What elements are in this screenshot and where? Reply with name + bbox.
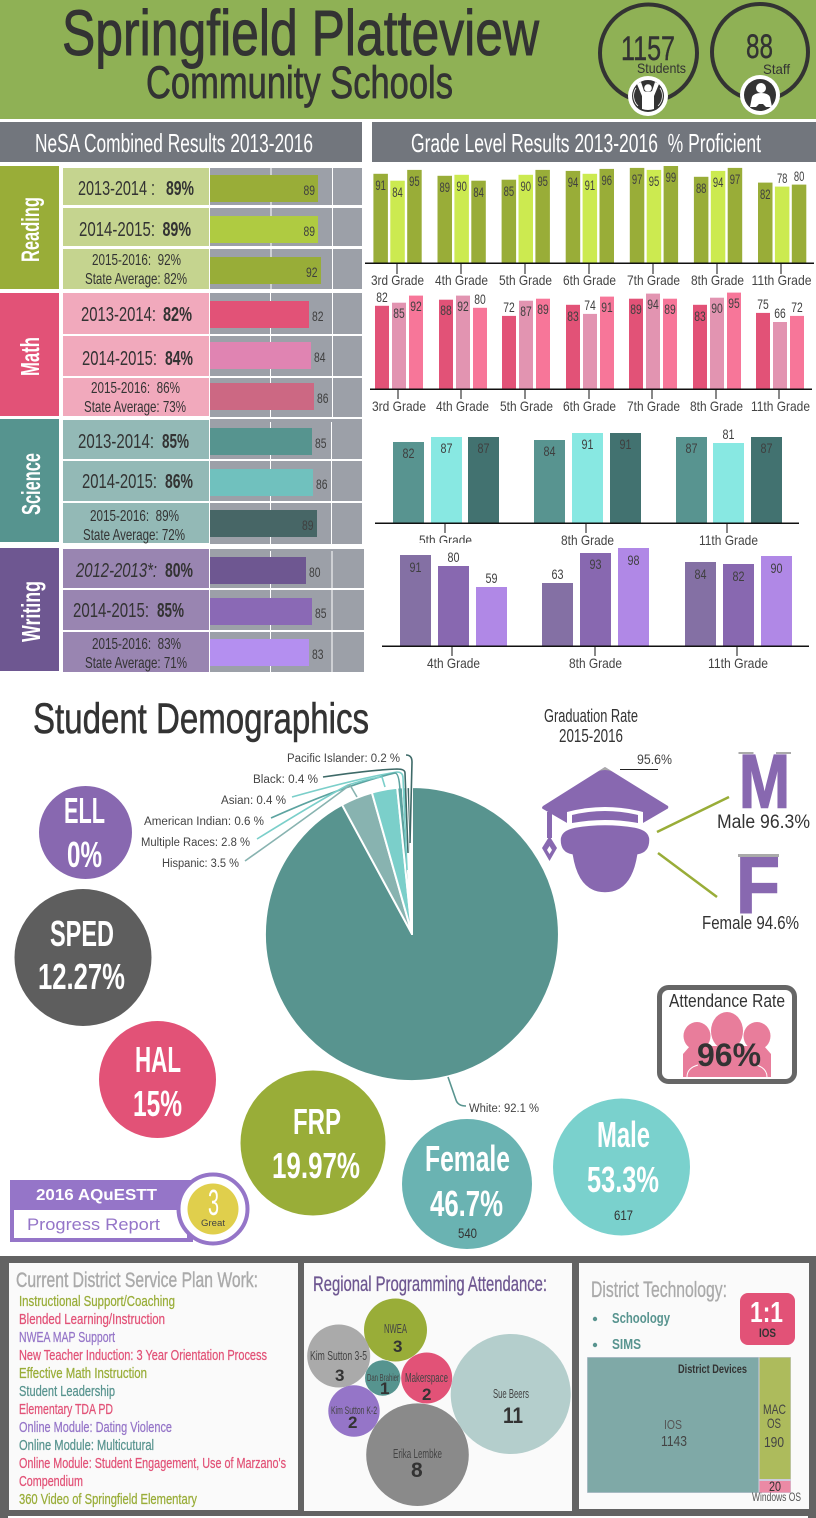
panel: science combined results: State Average: 72%	[83, 527, 185, 544]
bubble chart: attendance: 3	[335, 1366, 344, 1385]
bubble chart: attendance: Erika Lembke	[393, 1446, 442, 1461]
bar chart: reading by grade: 91	[375, 178, 386, 193]
treemap: district devices: 20	[769, 1478, 781, 1494]
bar chart: math by grade: 85	[393, 306, 405, 321]
panel: math combined results: 84%	[165, 348, 193, 370]
badge: 2016 AQuESTT progress report: 2016 AQuESTT	[36, 1187, 158, 1204]
panel: reading combined results: Reading	[17, 197, 45, 262]
pie chart: race and ethnicity: Multiple Races: 2.8 %	[141, 837, 250, 849]
panel: reading combined results: 89	[304, 224, 315, 239]
panel: science combined results: 86%	[165, 471, 193, 493]
bubble chart: attendance: Kim Sutton K-2	[331, 1405, 377, 1417]
treemap: district devices: 190	[764, 1434, 784, 1451]
bar chart: reading by grade: 84	[392, 185, 403, 200]
bubble: HAL: 15%	[133, 1083, 182, 1124]
panel: current district service plan work: Blended Learning/Instruction	[19, 1311, 165, 1328]
panel: current district service plan work: Compendium	[19, 1473, 83, 1490]
bar chart: math by grade: 74	[584, 298, 596, 313]
bar chart: reading by grade: 91	[585, 178, 595, 193]
badge: 2016 AQuESTT progress report: Progress Report	[27, 1215, 160, 1234]
bubble: ELL: 0%	[67, 834, 102, 875]
pie chart: race and ethnicity: White: 92.1 %	[469, 1103, 539, 1115]
bubble: ELL	[39, 786, 132, 879]
footer background	[0, 1256, 816, 1518]
bar chart: math by grade: 72	[503, 300, 515, 315]
bar chart: math by grade: 89	[630, 302, 642, 317]
bubble chart: attendance: Makerspace	[405, 1370, 448, 1385]
title	[62, 0, 540, 108]
bubble: SPED: 12.27%	[38, 956, 125, 997]
panel: writing combined results: Writing	[16, 581, 46, 642]
panel: science combined results: 86	[316, 477, 328, 492]
bar chart: science by grade: 82	[402, 446, 414, 461]
panel: math combined results: 86	[317, 391, 328, 406]
pie chart: race and ethnicity: Asian: 0.4 %	[221, 795, 286, 807]
panel: science combined results: 2013-2014:	[78, 431, 154, 453]
panel: writing combined results: 80	[309, 565, 320, 580]
bar chart: reading by grade: 99	[666, 170, 676, 185]
bar chart: math by grade: 92	[457, 299, 469, 314]
bar chart: science by grade: 5th Grade	[419, 532, 472, 548]
staff counter: Staff	[763, 61, 790, 77]
panel: reading combined results: 89%	[162, 219, 191, 241]
bar chart: writing by grade: 84	[694, 567, 707, 582]
panel: reading combined results: 2014-2015:	[79, 219, 155, 241]
female graduation rate	[702, 840, 799, 933]
bar chart: reading by grade: 8th Grade	[691, 272, 744, 288]
bubble: female: 46.7%	[430, 1183, 503, 1224]
panel: writing combined results: 2012-2013*:	[75, 560, 157, 582]
bubble: ELL: ELL	[64, 790, 105, 831]
staff counter: 88	[746, 28, 773, 66]
bar chart: reading by grade: 90	[456, 179, 467, 194]
bar chart: math by grade: 89	[664, 302, 676, 317]
panel: district technology: Schoology	[612, 1310, 670, 1327]
panel: writing combined results: 2014-2015:	[73, 600, 149, 622]
bubble chart: attendance: 1	[380, 1379, 389, 1398]
panel: math combined results: 2013-2014:	[81, 304, 156, 326]
bar chart: science by grade: 87	[686, 441, 698, 456]
panel: current district service plan work	[9, 1263, 298, 1510]
panel: current district service plan work: Current District Service Plan Work:	[16, 1269, 258, 1292]
panel: district technology: District Technology:	[591, 1277, 727, 1302]
icon: graduate with cap	[542, 767, 668, 893]
bar chart: math by grade: 95	[728, 296, 740, 311]
bar chart: reading by grade	[365, 166, 814, 288]
heading: NeSA combined results: NeSA Combined Results 2013-2016	[35, 128, 313, 158]
bar chart: science by grade	[375, 427, 799, 548]
callout: 1:1 iOS: IOS	[759, 1326, 776, 1340]
male graduation rate: M	[739, 740, 790, 824]
bar chart: reading by grade: 3rd Grade	[371, 272, 424, 288]
bar chart: reading by grade: 94	[568, 175, 579, 190]
bubble chart: attendance: 8	[411, 1459, 423, 1482]
panel: current district service plan work: Online Module: Dating Violence	[19, 1419, 172, 1436]
bar chart: writing by grade: 82	[732, 569, 744, 584]
bar chart: math by grade: 88	[440, 303, 452, 318]
treemap: district devices: OS	[767, 1415, 781, 1431]
panel: current district service plan work: Online Module: Multicutural	[19, 1437, 154, 1454]
male graduation rate	[717, 740, 810, 833]
panel: district technology: SIMS	[612, 1336, 641, 1353]
panel: science combined results	[0, 419, 362, 544]
treemap: district devices: MAC	[763, 1401, 786, 1417]
bar chart: science by grade: 11th Grade	[699, 532, 758, 548]
bar chart: science by grade: 91	[582, 437, 594, 452]
panel: writing combined results: State Average: 71%	[85, 655, 187, 672]
panel: science combined results: 89	[302, 518, 314, 533]
bar chart: math by grade: 4th Grade	[436, 398, 489, 414]
bubble: FRP: FRP	[293, 1101, 341, 1142]
panel: reading combined results: 92	[306, 265, 318, 280]
bar chart: math by grade: 94	[647, 297, 659, 312]
panel: writing combined results: 2015-2016: 83%	[92, 636, 181, 653]
bar chart: reading by grade: 6th Grade	[563, 272, 616, 288]
bar chart: math by grade: 89	[537, 302, 549, 317]
panel: science combined results: 2015-2016: 89%	[90, 508, 179, 525]
bar chart: reading by grade: 95	[409, 174, 420, 189]
panel: math combined results: 82	[312, 309, 324, 324]
bar chart: math by grade: 3rd Grade	[372, 398, 426, 414]
students counter	[600, 4, 697, 116]
bubble chart: attendance	[307, 1298, 571, 1506]
panel: reading combined results	[0, 166, 362, 289]
panel: math combined results	[0, 293, 362, 417]
title: Community Schools	[146, 57, 453, 108]
bar chart: reading by grade: 89	[440, 180, 450, 195]
panel: regional programming attendance	[304, 1263, 572, 1511]
bar chart: math by grade: 5th Grade	[500, 398, 553, 414]
bar chart: reading by grade: 5th Grade	[499, 272, 552, 288]
panel: math combined results: State Average: 73%	[84, 399, 186, 416]
bar chart: writing by grade: 11th Grade	[708, 655, 768, 671]
panel: science combined results: 2014-2015:	[82, 471, 157, 493]
panel: current district service plan work: Effective Math Instruction	[19, 1365, 147, 1382]
bubble: FRP: 19.97%	[272, 1145, 360, 1186]
panel: writing combined results: 80%	[165, 560, 193, 582]
panel: science combined results: 85%	[162, 431, 189, 453]
panel: math combined results: 82%	[163, 304, 192, 326]
bubble: male: Male	[597, 1114, 650, 1155]
panel: reading combined results: 2013-2014 :	[78, 178, 155, 200]
bar chart: math by grade: 82	[376, 290, 388, 305]
bar chart: math by grade: 7th Grade	[627, 398, 680, 414]
attendance rate card	[660, 988, 794, 1082]
badge: 2016 AQuESTT progress report	[10, 1174, 248, 1244]
bar chart: reading by grade: 84	[473, 185, 484, 200]
panel: current district service plan work: 360 Video of Springfield Elementary	[19, 1491, 197, 1508]
pie chart: race and ethnicity: American Indian: 0.6 %	[144, 816, 264, 828]
bubble: FRP	[240, 1070, 386, 1216]
bubble: male	[553, 1098, 690, 1236]
panel: current district service plan work: Online Module: Student Engagement, Use of Marzano's	[19, 1455, 286, 1472]
panel: math combined results: Math	[15, 337, 45, 376]
bar chart: reading by grade: 85	[504, 184, 514, 199]
bar chart: math by grade: 80	[474, 292, 486, 307]
bar chart: reading by grade: 97	[632, 172, 642, 187]
panel: current district service plan work: Instructional Support/Coaching	[19, 1293, 175, 1310]
bar chart: science by grade: 84	[544, 444, 556, 459]
bar chart: writing by grade: 59	[486, 571, 498, 586]
treemap: district devices: District Devices	[678, 1364, 747, 1376]
panel: writing combined results: 83	[312, 647, 324, 662]
panel: current district service plan work: NWEA MAP Support	[19, 1329, 116, 1346]
bubble: HAL: HAL	[135, 1039, 181, 1080]
bar chart: math by grade: 83	[567, 309, 579, 324]
panel: math combined results: 2015-2016: 86%	[91, 380, 180, 397]
bar chart: math by grade: 92	[410, 299, 422, 314]
treemap: district devices: 1143	[661, 1433, 687, 1450]
bar chart: science by grade: 81	[722, 427, 734, 442]
treemap: district devices	[587, 1357, 801, 1504]
panel: reading combined results: 89%	[166, 178, 194, 200]
bar chart: reading by grade: 96	[602, 173, 612, 188]
bar chart: math by grade: 8th Grade	[690, 398, 743, 414]
bar chart: reading by grade: 7th Grade	[627, 272, 680, 288]
panel: reading combined results: 2015-2016: 92%	[92, 252, 181, 269]
attendance rate card: 96%	[697, 1037, 761, 1073]
bar chart: science by grade: 87	[478, 441, 490, 456]
bubble: HAL	[99, 1021, 216, 1138]
bubble chart: attendance: NWEA	[384, 1321, 407, 1336]
bar chart: math by grade: 6th Grade	[563, 398, 616, 414]
bar chart: writing by grade: 93	[590, 557, 602, 572]
bar chart: writing by grade: 8th Grade	[569, 655, 622, 671]
bar chart: writing by grade: 98	[628, 553, 640, 568]
bar chart: writing by grade: 80	[448, 550, 460, 565]
male graduation rate: Male 96.3%	[717, 812, 810, 833]
panel: writing combined results	[0, 548, 364, 673]
bar chart: math by grade: 72	[791, 300, 803, 315]
bar chart: math by grade: 91	[601, 300, 613, 315]
graduation rate: 95.6%	[637, 751, 672, 767]
panel: district technology	[579, 1263, 809, 1509]
panel: current district service plan work: New Teacher Induction: 3 Year Orientation Process	[19, 1347, 267, 1364]
graduation rate: 2015-2016	[559, 726, 623, 746]
bar chart: reading by grade: 82	[760, 187, 771, 202]
attendance rate card: Attendance Rate	[669, 991, 785, 1011]
bubble: male: 53.3%	[587, 1159, 659, 1200]
panel: science combined results: 85	[315, 436, 326, 451]
staff counter	[712, 4, 808, 115]
bar chart: reading by grade: 95	[649, 174, 659, 189]
bar chart: science by grade: 87	[760, 441, 772, 456]
bar chart: writing by grade: 91	[410, 560, 422, 575]
bubble chart: attendance: 2	[422, 1385, 431, 1404]
bubble: female: Female	[425, 1138, 510, 1179]
panel: math combined results: 84	[314, 350, 326, 365]
callout: 1:1 iOS	[740, 1293, 795, 1345]
bar chart: science by grade: 91	[620, 437, 632, 452]
graduation rate: Graduation Rate	[544, 706, 638, 726]
panel: reading combined results: State Average: 82%	[85, 271, 187, 288]
bubble chart: attendance: 3	[393, 1337, 402, 1356]
bar chart: writing by grade: 90	[770, 561, 782, 576]
female graduation rate: F	[736, 840, 780, 930]
bar chart: reading by grade: 80	[794, 169, 804, 184]
bar chart: reading by grade: 97	[730, 172, 740, 187]
bar chart: math by grade: 75	[757, 297, 769, 312]
bubble: SPED	[14, 889, 152, 1026]
bar chart: reading by grade: 88	[696, 181, 706, 196]
panel: current district service plan work: Elementary TDA PD	[19, 1401, 113, 1418]
bar chart: science by grade: 8th Grade	[561, 532, 614, 548]
pie chart: race and ethnicity	[141, 753, 559, 1115]
bar chart: writing by grade: 63	[552, 567, 564, 582]
bar chart: math by grade	[370, 290, 812, 414]
bubble chart: attendance: Dan Brahier	[367, 1372, 399, 1384]
bar chart: math by grade: 87	[520, 304, 532, 319]
bubble chart: attendance: 11	[503, 1403, 523, 1428]
heading: student demographics: Student Demographics	[33, 695, 369, 743]
pie chart: race and ethnicity: Pacific Islander: 0.2 %	[287, 753, 400, 765]
students counter: Students	[637, 60, 686, 76]
panel: reading combined results: 89	[304, 183, 315, 198]
bar chart: reading by grade: 94	[713, 175, 724, 190]
panel: writing combined results: 85%	[157, 600, 184, 622]
panel: current district service plan work: Student Leadership	[19, 1383, 115, 1400]
graduation rate	[542, 706, 810, 933]
heading: NeSA combined results	[0, 122, 362, 162]
bubble chart: attendance: Sue Beers	[493, 1386, 529, 1401]
panel: math combined results: 2014-2015:	[82, 348, 157, 370]
bar chart: science by grade: 87	[440, 441, 452, 456]
callout: 1:1 iOS: 1:1	[750, 1297, 783, 1329]
bubble chart: attendance: Kim Sutton 3-5	[310, 1348, 367, 1363]
badge: 2016 AQuESTT progress report: Great	[201, 1218, 226, 1228]
bar chart: reading by grade: 90	[521, 179, 531, 194]
bubble chart: attendance: 2	[348, 1413, 357, 1432]
bar chart: reading by grade: 95	[537, 174, 548, 189]
bar chart: reading by grade: 78	[777, 171, 787, 186]
bubble: female	[402, 1119, 532, 1249]
pie chart: race and ethnicity: Black: 0.4 %	[253, 774, 318, 786]
panel: regional programming attendance: Regional Programming Attendance:	[313, 1273, 547, 1296]
bar chart: writing by grade	[382, 548, 809, 671]
bubble: SPED: SPED	[50, 913, 114, 954]
heading: grade level results	[372, 122, 816, 162]
pie chart: race and ethnicity: Hispanic: 3.5 %	[162, 858, 239, 870]
icon: three people	[683, 1012, 771, 1077]
header banner	[0, 0, 816, 119]
bar chart: reading by grade: 4th Grade	[435, 272, 488, 288]
bubble: female: 540	[458, 1225, 477, 1241]
bar chart: math by grade: 90	[711, 301, 723, 316]
female graduation rate: Female 94.6%	[702, 913, 799, 933]
bar chart: math by grade: 66	[774, 306, 786, 321]
panel: science combined results: Science	[16, 453, 46, 515]
bar chart: math by grade: 83	[694, 309, 706, 324]
badge: 2016 AQuESTT progress report: 3	[208, 1182, 219, 1223]
panel: writing combined results: 85	[315, 606, 326, 621]
bubble: male: 617	[614, 1207, 633, 1223]
bar chart: writing by grade: 4th Grade	[427, 655, 480, 671]
treemap: district devices: IOS	[664, 1417, 682, 1432]
students counter: 1157	[621, 30, 675, 68]
